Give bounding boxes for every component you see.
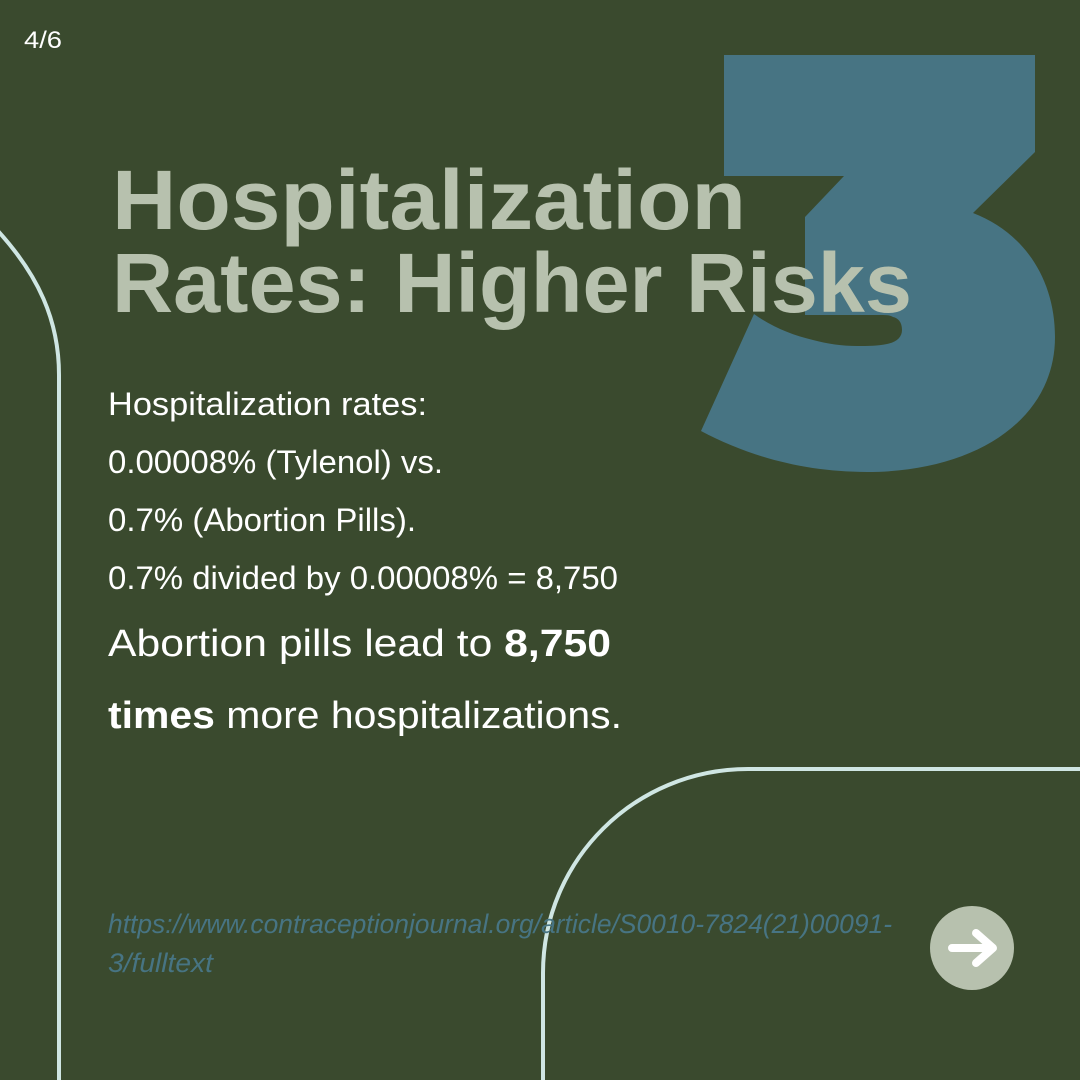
title: Hospitalization bbox=[112, 153, 746, 247]
source link bbox=[108, 909, 892, 978]
body text: rates comparison bbox=[108, 386, 618, 596]
source link: https://www.contraceptionjournal.org/article/S0010-7824(21)00091- bbox=[108, 909, 892, 939]
source link: 3/fulltext bbox=[108, 948, 215, 978]
body text: rates comparison: Hospitalization rates: bbox=[108, 386, 427, 422]
decorative outline: left arch bbox=[0, 231, 59, 1080]
body text: key conclusion bbox=[108, 623, 622, 737]
title: Rates: Higher Risks bbox=[112, 236, 912, 330]
body text: rates comparison: 0.7% (Abortion Pills). bbox=[108, 502, 416, 538]
body text: key conclusion: Abortion pills lead to 8,750 bbox=[108, 623, 611, 665]
body text: rates comparison: 0.00008% (Tylenol) vs. bbox=[108, 444, 443, 480]
body text: rates comparison: 0.7% divided by 0.00008% = 8,750 bbox=[108, 560, 618, 596]
icon: next arrow button bbox=[930, 906, 1014, 990]
big number 3 bbox=[701, 55, 1055, 472]
title bbox=[112, 153, 912, 330]
page number: 4/6 bbox=[24, 27, 62, 54]
decorative outline: bottom right arch bbox=[543, 769, 1080, 1080]
body text: key conclusion: times more hospitalizations. bbox=[108, 695, 622, 737]
